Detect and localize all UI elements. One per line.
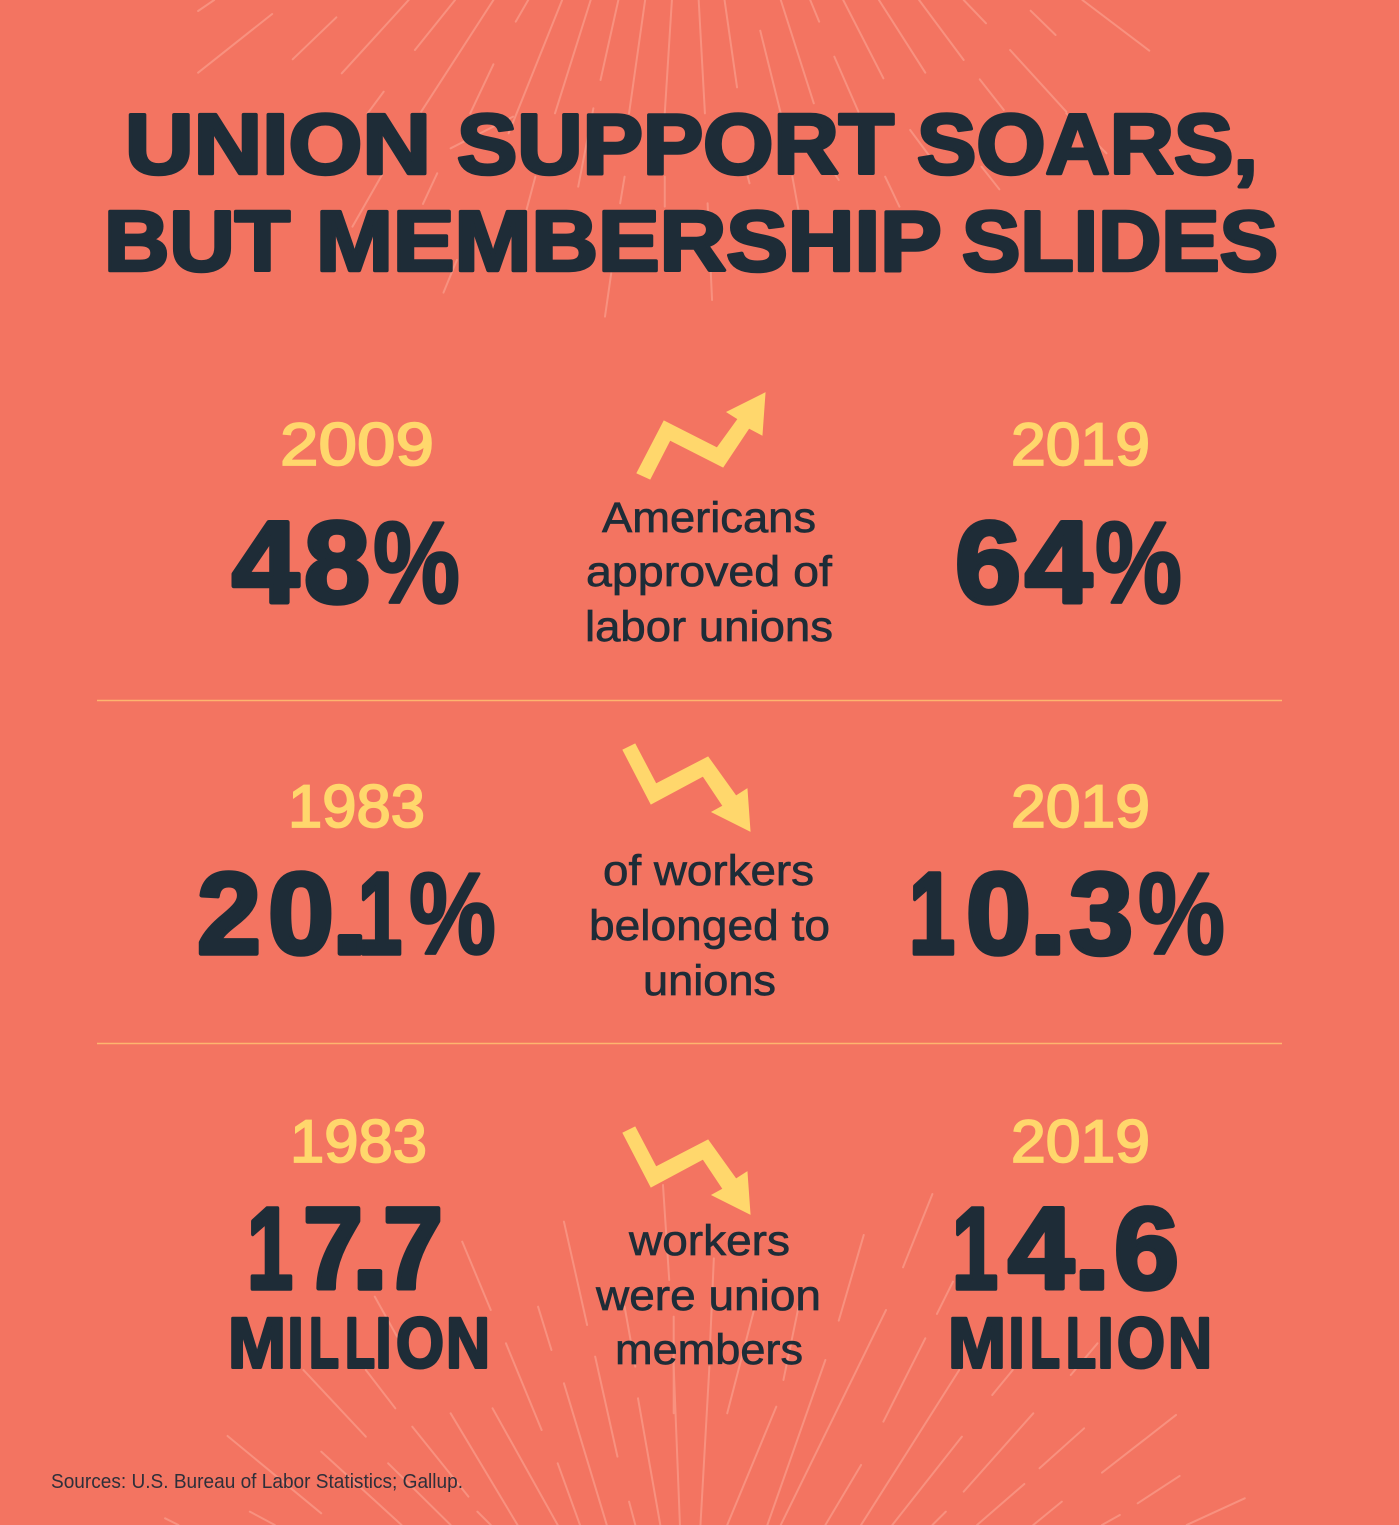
value: 17.7 million: M [228, 1304, 286, 1384]
value: 20.1%: 2 [197, 848, 261, 978]
value: 17.7 million: 1 [247, 1184, 293, 1314]
value: 14.6 million: M [948, 1304, 1006, 1384]
icon: rising arrow [637, 393, 765, 479]
value: 10.3%: . [1029, 848, 1067, 978]
value: 17.7 million: I [376, 1304, 392, 1384]
description: Americans approved of labor unions: labor unions [585, 603, 833, 651]
description: Americans approved of labor unions: approved of [586, 548, 833, 596]
value: 17.7 million: 7 [383, 1184, 443, 1314]
description: Americans approved of labor unions: Americans [602, 494, 816, 542]
value: 17.7 million: . [351, 1184, 389, 1314]
value: 64%: 6 [955, 498, 1021, 628]
year: 2009: 2009 [280, 411, 434, 478]
value: 14.6 million: 1 [952, 1184, 998, 1314]
value: 20.1%: 0 [268, 848, 334, 978]
description: of workers belonged to unions [589, 847, 830, 1005]
value: 14.6 million: I [1098, 1304, 1114, 1384]
value: 20.1%: 1 [358, 848, 402, 978]
title: SLIDES [962, 194, 1278, 290]
value: 17.7 million [228, 1184, 490, 1384]
year: 1983: 1983 [288, 773, 425, 840]
value: 17.7 million: L [309, 1304, 339, 1384]
value: 14.6 million [948, 1184, 1212, 1384]
value: 64%: % [1095, 498, 1182, 628]
value: 10.3%: 1 [909, 848, 955, 978]
value: 48%: 4 [232, 498, 299, 628]
description: of workers belonged to unions: of workers [603, 847, 814, 895]
value: 10.3%: % [1138, 848, 1225, 978]
value: 14.6 million: . [1073, 1184, 1111, 1314]
icon: falling arrow [623, 744, 750, 831]
value: 14.6 million: 6 [1114, 1184, 1179, 1314]
value: 14.6 million: I [1008, 1304, 1024, 1384]
icon: falling arrow [623, 1127, 750, 1214]
value: 20.1%: % [409, 848, 496, 978]
value: 17.7 million: O [396, 1304, 444, 1384]
value: 17.7 million: I [288, 1304, 304, 1384]
value: 17.7 million: N [446, 1304, 490, 1384]
panel: share of workers in unions [197, 744, 1225, 1005]
description: Americans approved of labor unions [585, 494, 833, 651]
description: workers were union members: workers [628, 1217, 790, 1265]
value: 14.6 million: N [1168, 1304, 1212, 1384]
title: MEMBERSHIP [316, 194, 940, 290]
description: of workers belonged to unions: belonged to [589, 902, 830, 950]
panel: union member counts [228, 1108, 1212, 1384]
value: 17.7 million: 7 [303, 1184, 363, 1314]
value: 14.6 million: L [1030, 1304, 1060, 1384]
value: 48%: 8 [304, 498, 370, 628]
panel: approval of labor unions [232, 393, 1182, 651]
title [104, 98, 1278, 290]
description: of workers belonged to unions: unions [643, 957, 776, 1005]
title: BUT [104, 194, 290, 290]
title: UNION [125, 98, 431, 192]
value: 14.6 million: O [1117, 1304, 1165, 1384]
description: workers were union members [595, 1217, 821, 1374]
value: 48%: % [373, 498, 460, 628]
description: workers were union members: members [615, 1326, 803, 1374]
value: 10.3%: 0 [966, 848, 1031, 978]
year: 2019: 2019 [1011, 411, 1150, 478]
title: SUPPORT [457, 98, 894, 192]
year: 2019: 2019 [1011, 773, 1150, 840]
description: workers were union members: were union [595, 1272, 821, 1320]
value: 64%: 4 [1025, 498, 1092, 628]
year: 1983: 1983 [290, 1108, 427, 1175]
source note: Sources: U.S. Bureau of Labor Statistics; Gallup. [51, 1471, 463, 1493]
value: 14.6 million: 4 [1008, 1184, 1074, 1314]
year: 2019: 2019 [1011, 1108, 1150, 1175]
value: 14.6 million: L [1066, 1304, 1096, 1384]
value: 20.1%: . [331, 848, 369, 978]
title: SOARS, [917, 98, 1258, 192]
value: 17.7 million: L [345, 1304, 375, 1384]
value: 10.3%: 3 [1069, 848, 1133, 978]
